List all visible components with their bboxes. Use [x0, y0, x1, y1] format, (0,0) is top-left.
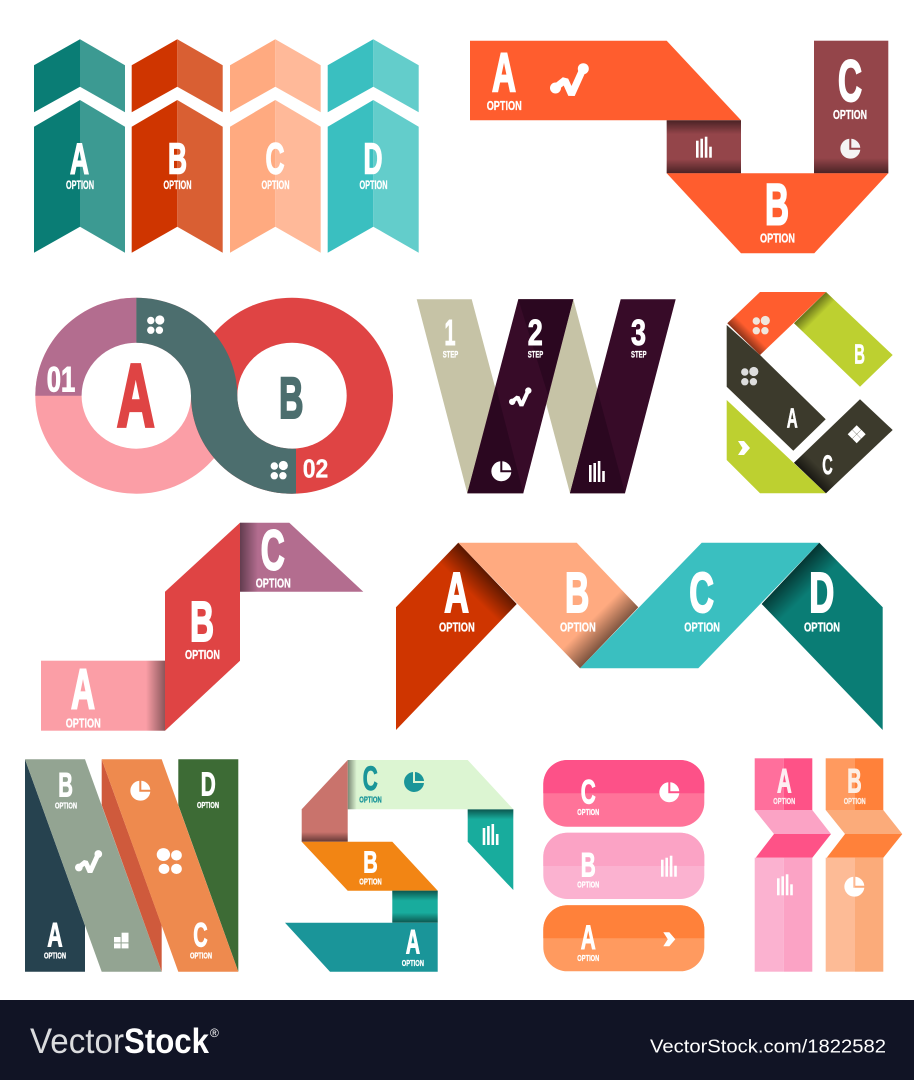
panel: zigzag ribbon A B C D	[396, 543, 883, 730]
section A	[41, 658, 165, 731]
left ring quadrant 01	[35, 298, 136, 396]
strip A: OPTION	[44, 950, 66, 960]
lime section lower	[727, 400, 826, 493]
ribbon section C	[814, 41, 888, 173]
strip D: D	[201, 766, 216, 803]
section D	[762, 543, 883, 730]
step 2: 2	[528, 312, 543, 353]
chevron column C	[230, 39, 321, 253]
button A: A	[581, 919, 596, 957]
strip D	[178, 759, 238, 972]
step 2: STEP	[528, 349, 544, 360]
button A: OPTION	[577, 953, 599, 963]
ribbon section A: OPTION	[487, 98, 522, 113]
panel: diagonal strips A B C D	[25, 759, 238, 972]
right ring	[191, 298, 393, 494]
ribbon section A	[470, 41, 741, 120]
panel: S-shaped ribbon A B C	[285, 760, 513, 972]
fold rose	[302, 760, 348, 842]
step 3	[631, 312, 647, 360]
section A: A	[71, 658, 95, 722]
strip 2 dark	[467, 299, 573, 493]
section C pale green	[348, 760, 513, 809]
panel: rounded option buttons	[543, 760, 704, 971]
lime section B: B	[854, 338, 865, 369]
icon: diamonds	[848, 425, 866, 443]
chevron column D	[328, 39, 419, 253]
chevron column D: OPTION	[360, 178, 388, 192]
strip 4 dark	[570, 299, 676, 493]
section B: OPTION	[560, 620, 596, 635]
section C: OPTION	[256, 576, 291, 591]
button A	[543, 905, 704, 971]
strip C: OPTION	[190, 950, 212, 960]
orange section	[727, 292, 826, 355]
image id: VectorStock.com/1822582	[650, 1036, 886, 1057]
left ring	[35, 298, 237, 494]
section C pale green: OPTION	[359, 795, 382, 805]
label 01: 01	[47, 361, 75, 400]
step 3: STEP	[631, 349, 647, 360]
section B: B	[565, 561, 589, 625]
strip B: B	[58, 767, 73, 805]
step 1	[443, 312, 459, 360]
dark section C	[794, 399, 893, 493]
section C: C	[689, 561, 714, 625]
strip fold	[102, 759, 162, 972]
chevron column A: OPTION	[66, 178, 94, 192]
section B orange	[302, 842, 438, 891]
logo: ®	[210, 1026, 219, 1040]
section B: OPTION	[185, 647, 220, 662]
button B: B	[581, 847, 596, 885]
dark section A: A	[787, 402, 798, 433]
ribbon section A: A	[492, 41, 516, 103]
section C	[240, 518, 363, 592]
button B	[543, 833, 704, 899]
button C: C	[581, 773, 596, 811]
section B orange: OPTION	[359, 877, 382, 887]
panel: W-shaped steps 1 2 3	[417, 299, 676, 493]
section A blue teal	[285, 923, 438, 972]
chevron column B	[132, 39, 223, 253]
strip 3 beige	[518, 299, 625, 493]
section D: D	[809, 561, 834, 625]
step 1: STEP	[443, 349, 459, 360]
chevron column B: OPTION	[164, 178, 192, 192]
chevron column D: D	[364, 134, 382, 184]
panel: staircase ribbon A B C	[41, 518, 363, 731]
step 2	[528, 312, 544, 360]
chevron column A: A	[70, 134, 89, 184]
chevron column C: OPTION	[262, 178, 290, 192]
section C: OPTION	[684, 620, 720, 635]
panel: orange arrow column B	[826, 758, 902, 972]
step 1: 1	[444, 312, 456, 353]
left ring centre	[82, 343, 191, 449]
panel: pink arrow column A: OPTION	[773, 796, 795, 806]
icon: dots top	[147, 315, 164, 334]
section C pale green: C	[363, 760, 378, 798]
chevron column A	[34, 39, 125, 253]
panel: chevron columns A B C D	[34, 39, 419, 253]
icon: line chart	[509, 387, 532, 406]
panel: pink arrow column A	[755, 758, 831, 972]
strip B: OPTION	[55, 800, 77, 810]
label 02: 02	[303, 453, 328, 483]
icon: pie	[491, 461, 511, 481]
chevron column C: C	[266, 134, 284, 184]
panel: orange arrow column B: B	[847, 762, 862, 800]
ribbon fold with bars icon	[667, 120, 741, 173]
section D: OPTION	[804, 620, 840, 635]
section A: A	[444, 561, 469, 625]
section B orange: B	[363, 844, 378, 879]
logo	[30, 1022, 219, 1061]
section A blue teal: OPTION	[402, 958, 424, 968]
footer bar	[0, 1000, 914, 1080]
strip 1 beige	[417, 299, 523, 493]
ribbon section C: OPTION	[833, 107, 867, 122]
strip C: C	[193, 917, 208, 955]
button B: OPTION	[577, 880, 599, 890]
dark section C: C	[822, 450, 833, 480]
section A: OPTION	[439, 620, 475, 635]
panel: interlocking rings A B	[35, 298, 393, 494]
strip A: A	[47, 917, 63, 955]
ribbon section B: OPTION	[760, 231, 795, 246]
ribbon section B	[667, 172, 888, 253]
S-shaped band	[136, 298, 296, 494]
strip A	[25, 759, 85, 972]
teal tail with bars	[468, 809, 513, 890]
panel: diamond ribbon A B C	[727, 292, 893, 493]
strip C	[102, 759, 238, 972]
icon: windows	[114, 933, 128, 948]
chevron column B: B	[168, 134, 187, 184]
section A blue teal: A	[406, 923, 420, 961]
ribbon section B: B	[765, 172, 789, 238]
button C: OPTION	[577, 807, 599, 817]
icon: line chart	[550, 63, 589, 94]
section B: B	[190, 590, 214, 654]
logo: Vector	[30, 1022, 124, 1061]
right ring centre	[237, 343, 347, 449]
section C: C	[261, 518, 285, 582]
section B	[458, 543, 638, 668]
strip D: OPTION	[197, 800, 219, 810]
step 3: 3	[631, 312, 646, 353]
panel: orange folded ribbon A B C	[470, 41, 888, 253]
panel: pink arrow column A: A	[777, 762, 792, 800]
button C	[543, 760, 704, 827]
letter A: A	[117, 345, 155, 445]
section A	[396, 543, 517, 730]
letter B: B	[279, 366, 304, 431]
logo: Stock	[124, 1022, 209, 1061]
icon: bars	[589, 461, 605, 482]
ribbon section C: C	[838, 49, 862, 114]
section A: OPTION	[66, 716, 101, 731]
fold teal	[392, 891, 438, 923]
lime section B	[794, 292, 893, 387]
panel: orange arrow column B: OPTION	[844, 796, 866, 806]
section B	[165, 523, 240, 731]
strip B	[25, 759, 162, 972]
dark section A	[727, 325, 826, 451]
section C	[580, 543, 819, 668]
icon: dots bottom	[271, 461, 288, 479]
